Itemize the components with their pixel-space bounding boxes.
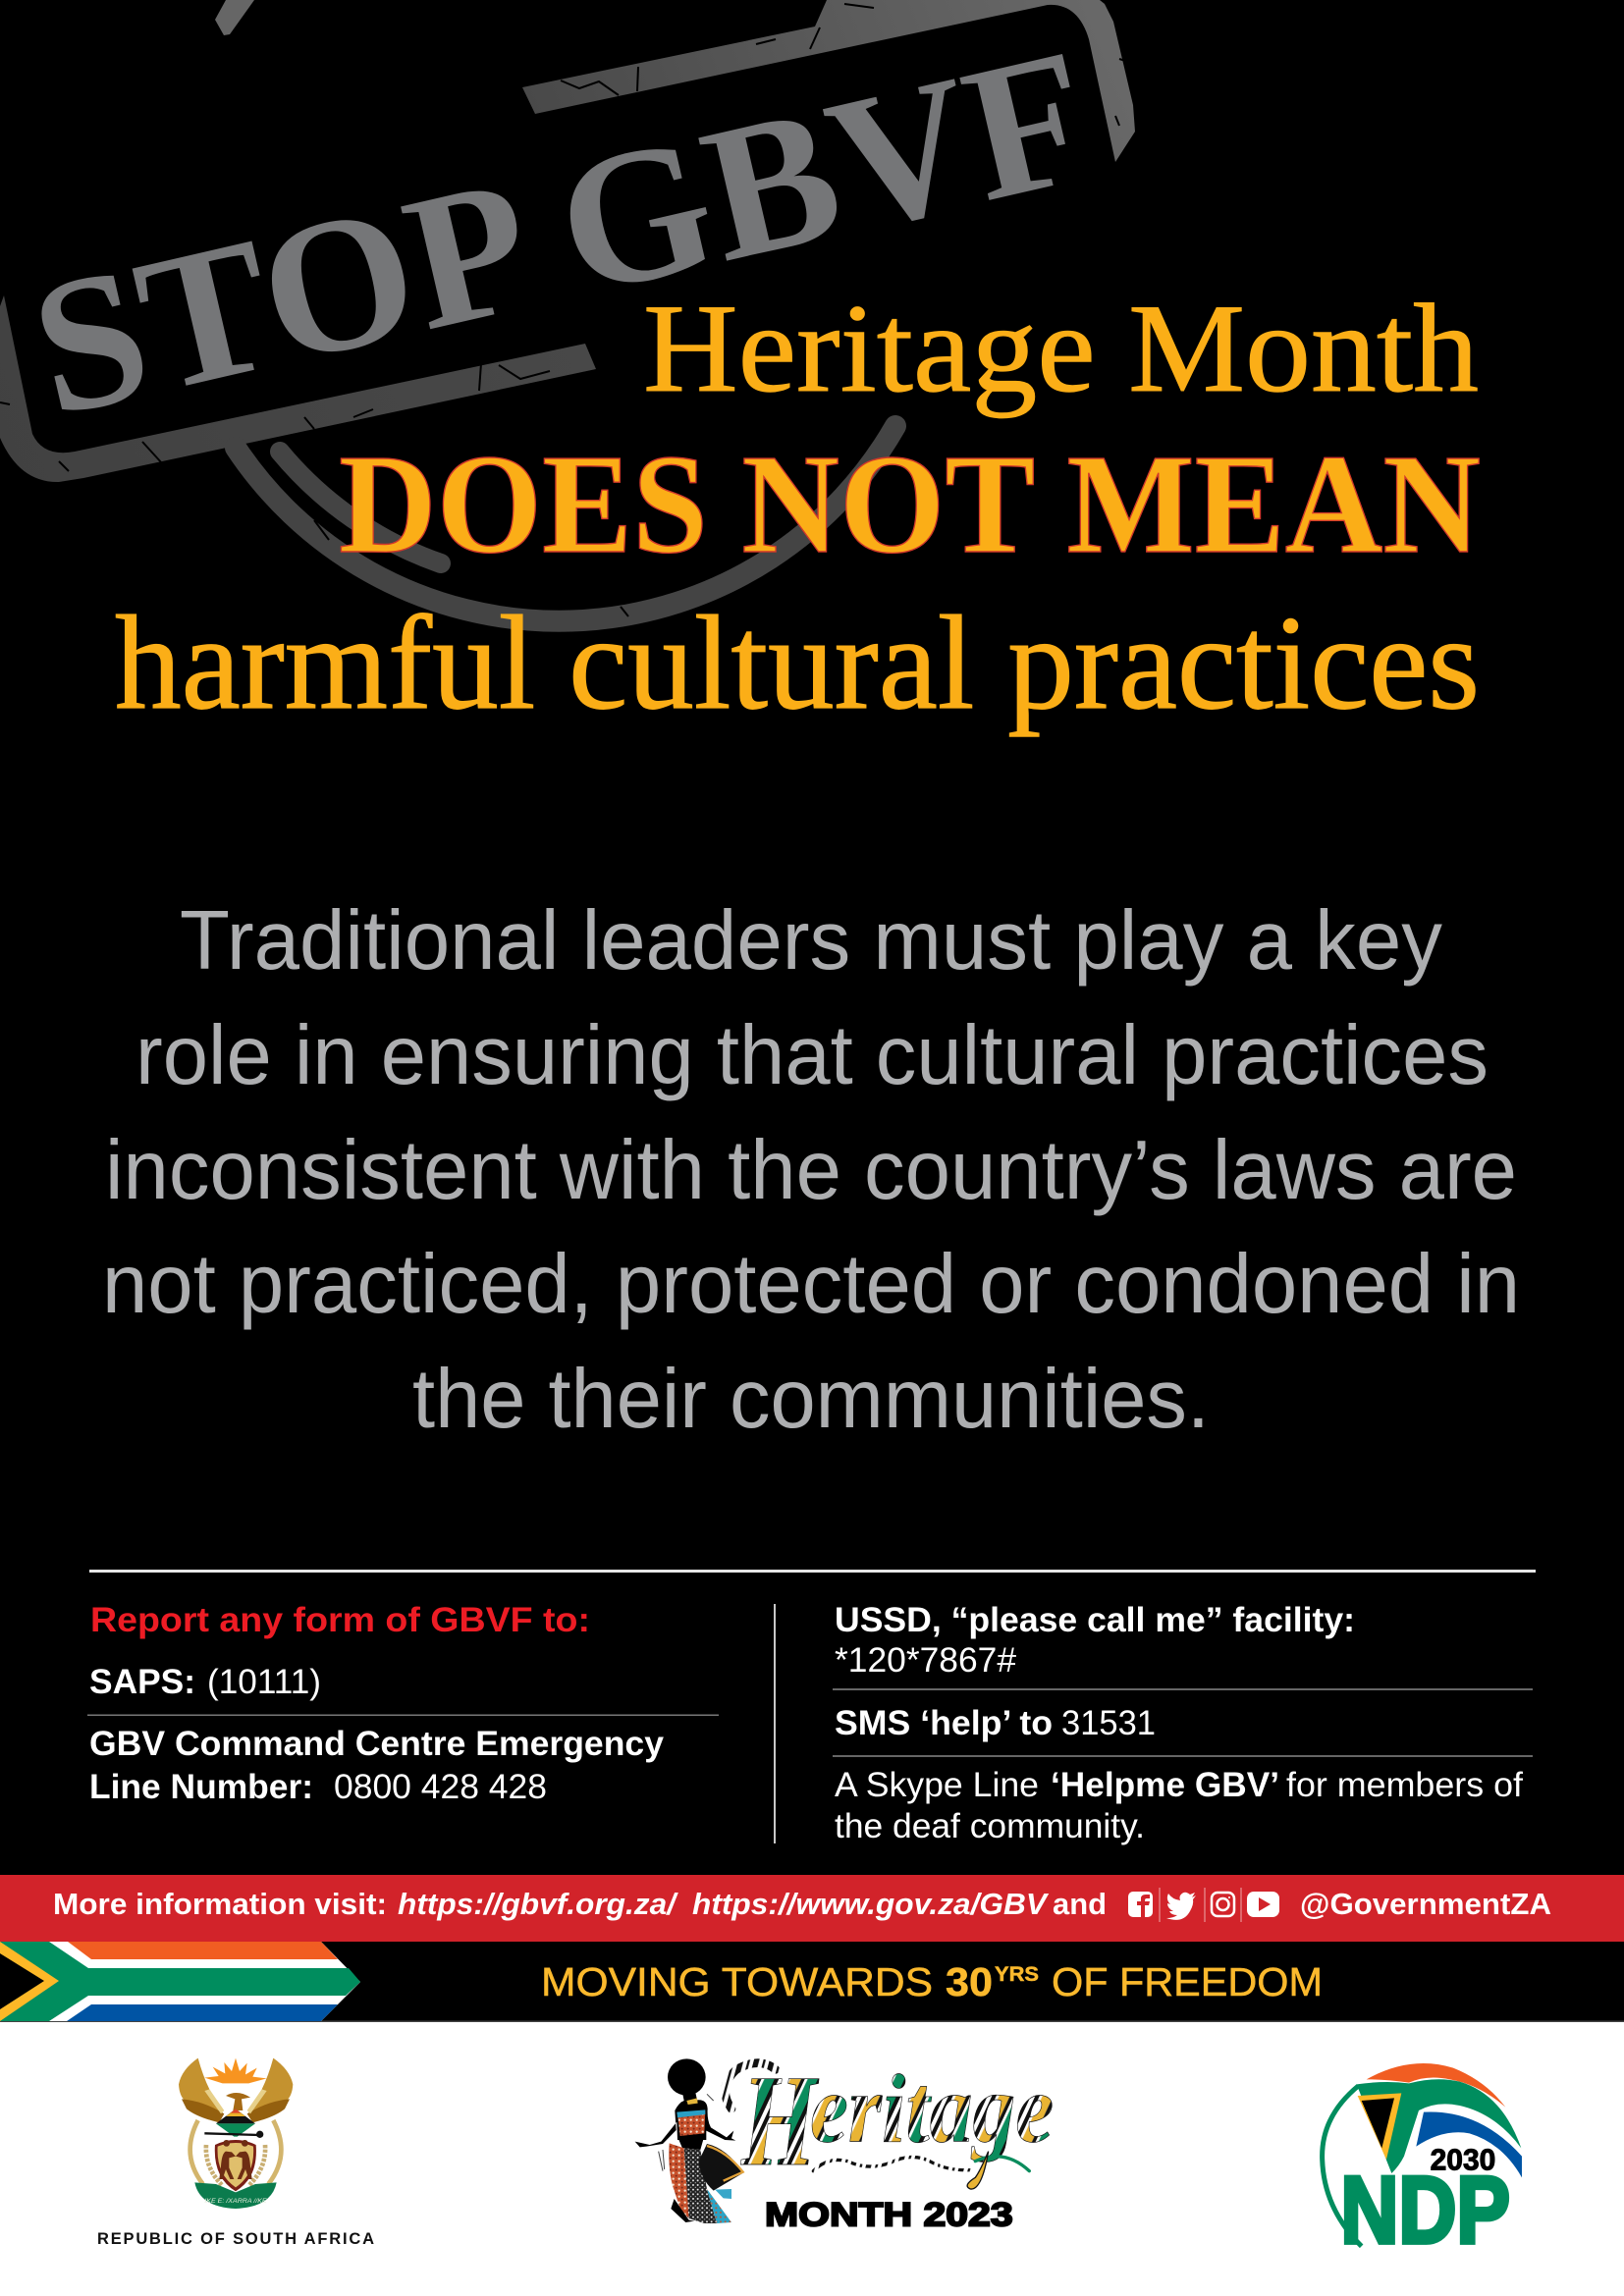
GBV command centre number: GBV Command Centre Emergency: [89, 1725, 665, 1763]
SAPS number: [89, 1663, 321, 1701]
shield: [215, 2140, 256, 2191]
report heading: Report any form of GBVF to:: [90, 1601, 590, 1639]
USSD facility: USSD, “please call me” facility:: [835, 1601, 1355, 1639]
logo: Heritage Month 2023: [635, 2048, 1054, 2234]
shield figures: [219, 2140, 252, 2179]
red information banner: [0, 1875, 1624, 1942]
statement line 5: the their communities.: [412, 1353, 1210, 1446]
icon: youtube: [1247, 1892, 1279, 1917]
title line 3: harmful cultural practices: [115, 588, 1480, 737]
slogan text: [541, 1959, 1323, 2004]
slogan text: YRS: [995, 1963, 1039, 1986]
icon: instagram: [1212, 1893, 1234, 1916]
title block: [115, 278, 1481, 737]
blue band: [1416, 2111, 1522, 2177]
left wing: [179, 2058, 221, 2113]
dancer with drum: [635, 2058, 743, 2223]
script word Heritage: H: [740, 2048, 820, 2193]
icon: facebook: [1128, 1892, 1153, 1917]
Skype line: the deaf community.: [835, 1807, 1145, 1845]
caption MONTH 2023: MONTH 2023: [765, 2197, 1013, 2234]
orange arc: [1367, 2063, 1505, 2108]
stamp wording: STOP GBVF: [15, 8, 1110, 457]
black strip: moving towards 30 years: [0, 1942, 1624, 2022]
Skype line: [835, 1766, 1523, 1845]
statement line 4: not practiced, protected or condoned in: [102, 1238, 1520, 1331]
USSD facility: *120*7867#: [835, 1641, 1017, 1680]
slogan text: MOVING TOWARDS: [541, 1959, 933, 2004]
banner text: @GovernmentZA: [1300, 1887, 1551, 1921]
stamp circle: top fragment: [215, 0, 254, 35]
banner text: More information visit:: [53, 1887, 387, 1921]
title line 2: DOES NOT MEAN: [339, 426, 1481, 583]
stamp: STOP GBVF watermark: [0, 0, 1135, 621]
SMS line: 31531: [1061, 1704, 1156, 1742]
stamp frame: lower-left edge: [0, 295, 596, 482]
black triangle: [1362, 2098, 1394, 2148]
2030 label: 2030: [1431, 2144, 1495, 2177]
reporting panel: left column: [87, 1601, 719, 1806]
stamp cracks: [0, 4, 1125, 616]
script word Heritage: [740, 2048, 1054, 2193]
motto ribbon: [194, 2182, 277, 2209]
GBV command centre number: Line Number:: [89, 1768, 313, 1806]
yellow border: [1358, 2093, 1401, 2160]
coat of arms caption: REPUBLIC OF SOUTH AFRICA: [97, 2230, 374, 2248]
logo: NDP 2030: [1323, 2063, 1522, 2264]
statement line 3: inconsistent with the country’s laws are: [105, 1124, 1517, 1217]
dancer skirt: [669, 2143, 689, 2218]
Skype line: ‘Helpme GBV’: [1051, 1766, 1279, 1804]
drum: [699, 2144, 743, 2191]
slogan text: 30: [946, 1959, 993, 2004]
stamp circle: inner arc: [280, 452, 441, 563]
script flourishes: [726, 2063, 1029, 2189]
title line 1: Heritage Month: [643, 278, 1479, 418]
outer ring: [1323, 2086, 1362, 2246]
Skype line: for members of: [1286, 1766, 1523, 1804]
logo: coat of arms: [179, 2058, 293, 2209]
statement line 1: Traditional leaders must play a key: [180, 894, 1442, 988]
motto ribbon: IKE E: /XARRA //KE: [204, 2198, 267, 2205]
sun: [204, 2058, 267, 2083]
banner text: https://gbvf.org.za/: [398, 1887, 678, 1921]
stamp circle: outer arc: [236, 426, 895, 621]
script word Heritage: eritage: [810, 2055, 1054, 2163]
right wing: [250, 2058, 293, 2113]
SAPS number: (10111): [207, 1663, 321, 1701]
stamp frame: upper-right edge: [522, 0, 1135, 162]
GBV command centre number: [89, 1725, 665, 1806]
diamond crest: [216, 2109, 255, 2123]
SMS line: SMS ‘help’ to: [835, 1704, 1053, 1742]
NDP wordmark: NDP: [1340, 2159, 1510, 2264]
side tusks: [190, 2120, 281, 2184]
banner text: https://www.gov.za/GBV: [692, 1887, 1049, 1921]
reporting panel: right column: [833, 1601, 1533, 1845]
Skype line: A Skype Line: [835, 1766, 1039, 1804]
USSD facility: [835, 1601, 1355, 1680]
slogan text: OF FREEDOM: [1052, 1959, 1323, 2004]
wheat: [206, 2145, 265, 2186]
South African flag arrow: [0, 1942, 360, 2021]
statement line 2: role in ensuring that cultural practices: [135, 1009, 1489, 1102]
spear and knobkerrie: [204, 2133, 258, 2135]
SAPS number: SAPS:: [89, 1663, 195, 1701]
bird head and inner wings: [204, 2089, 267, 2113]
green flag swoosh: [1357, 2079, 1521, 2173]
GBV command centre number: 0800 428 428: [334, 1768, 547, 1806]
icon: twitter: [1166, 1893, 1196, 1920]
banner text: [53, 1887, 1551, 1921]
banner text: and: [1053, 1887, 1107, 1921]
SMS line: [835, 1704, 1156, 1742]
body statement: [102, 894, 1520, 1446]
white logo footer: [0, 2022, 1624, 2296]
